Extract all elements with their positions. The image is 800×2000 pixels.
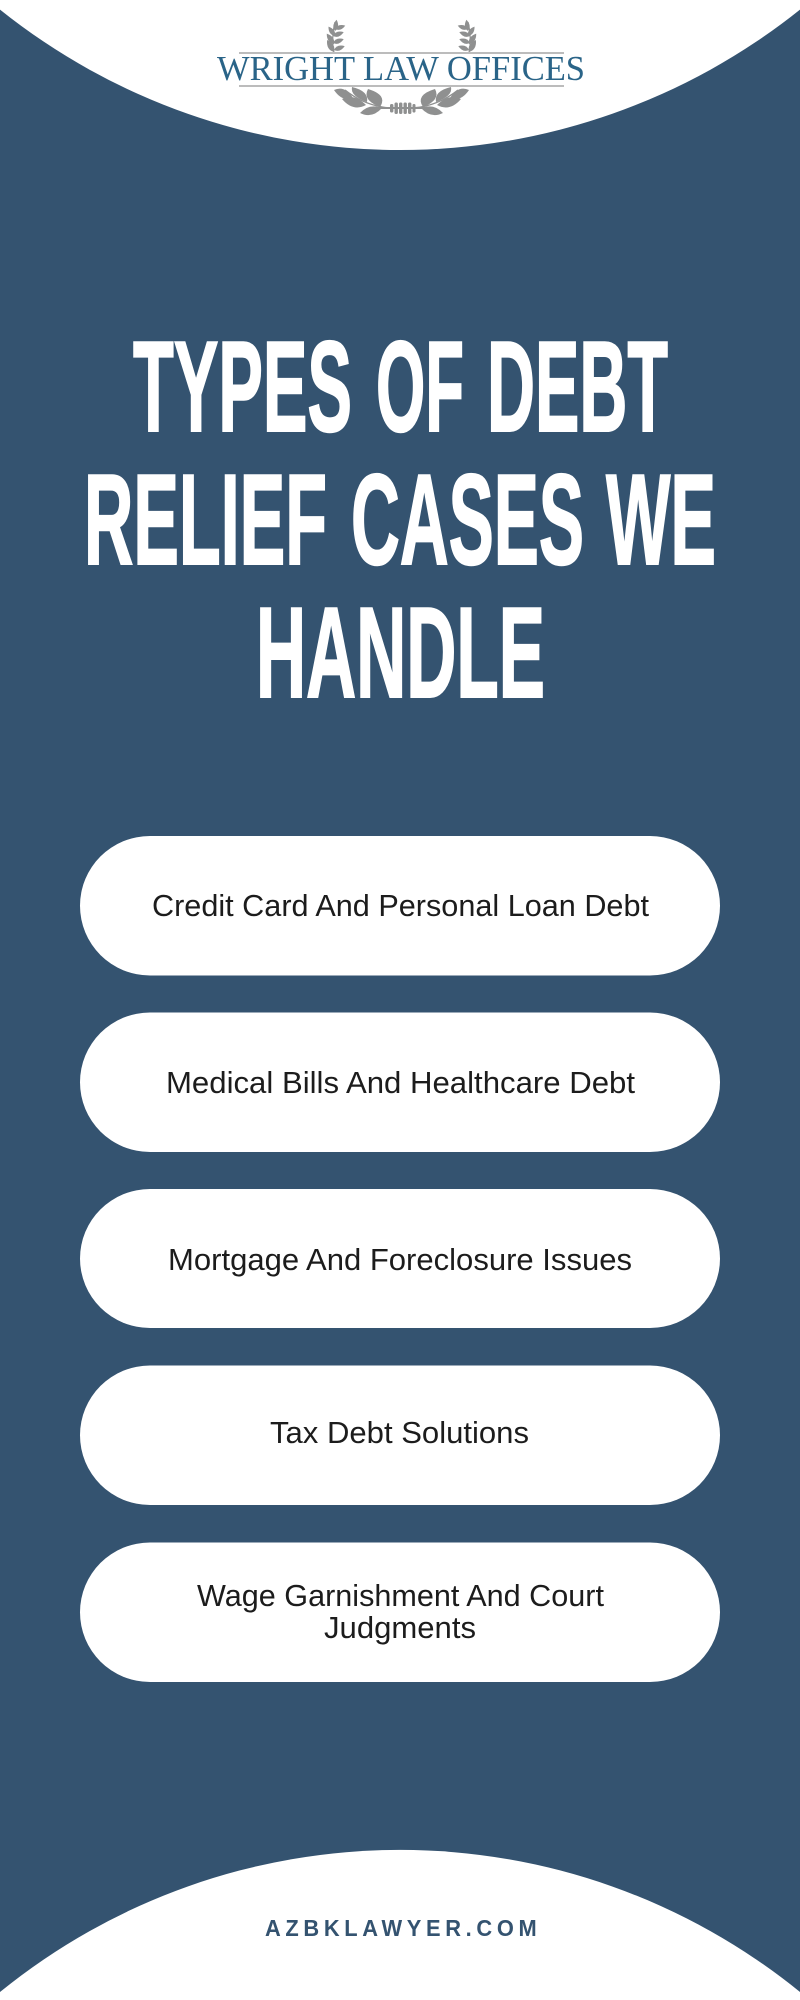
icon: lower left laurel sprig: [334, 87, 390, 115]
logo white band: [239, 53, 564, 86]
pill: tax debt solutions: [80, 1366, 720, 1505]
pill: medical bills and healthcare debt: [80, 1012, 720, 1152]
title: [84, 315, 716, 725]
title line 1: OF: [376, 315, 464, 459]
logo: Wright Law Offices: [217, 19, 585, 115]
pill: credit card and personal loan debt: Credit Card And Personal Loan Debt: [152, 888, 649, 923]
icon: gavel handle: [378, 102, 425, 114]
pill: wage garnishment and court judgments: [80, 1542, 720, 1682]
logo rule top: [239, 52, 564, 54]
title line 3: HANDLE: [256, 581, 545, 725]
title line 2: CASES: [351, 448, 584, 592]
icon: upper left laurel sprig: [325, 19, 346, 53]
pill: tax debt solutions: Tax Debt Solutions: [270, 1415, 529, 1450]
logo wordmark: WRIGHT LAW OFFICES: [217, 49, 585, 88]
icon: upper right laurel sprig: [457, 19, 478, 53]
footer arc: [0, 1850, 800, 2000]
logo rule bottom: [239, 85, 564, 87]
pill: mortgage and foreclosure issues: Mortgage And Foreclosure Issues: [168, 1242, 632, 1277]
title line 1: TYPES: [133, 315, 352, 459]
pill: credit card and personal loan debt: [80, 836, 720, 976]
icon: lower right laurel sprig: [413, 87, 469, 115]
title line 2: RELIEF: [84, 448, 327, 592]
pill: mortgage and foreclosure issues: [80, 1189, 720, 1328]
pill: wage garnishment and court judgments: Judgments: [324, 1610, 476, 1645]
header arc: [0, 0, 800, 150]
pill: wage garnishment and court judgments: Wage Garnishment And Court: [197, 1578, 604, 1613]
pill: medical bills and healthcare debt: Medical Bills And Healthcare Debt: [166, 1065, 635, 1100]
footer url: AZBKLAWYER.COM: [265, 1915, 537, 1941]
